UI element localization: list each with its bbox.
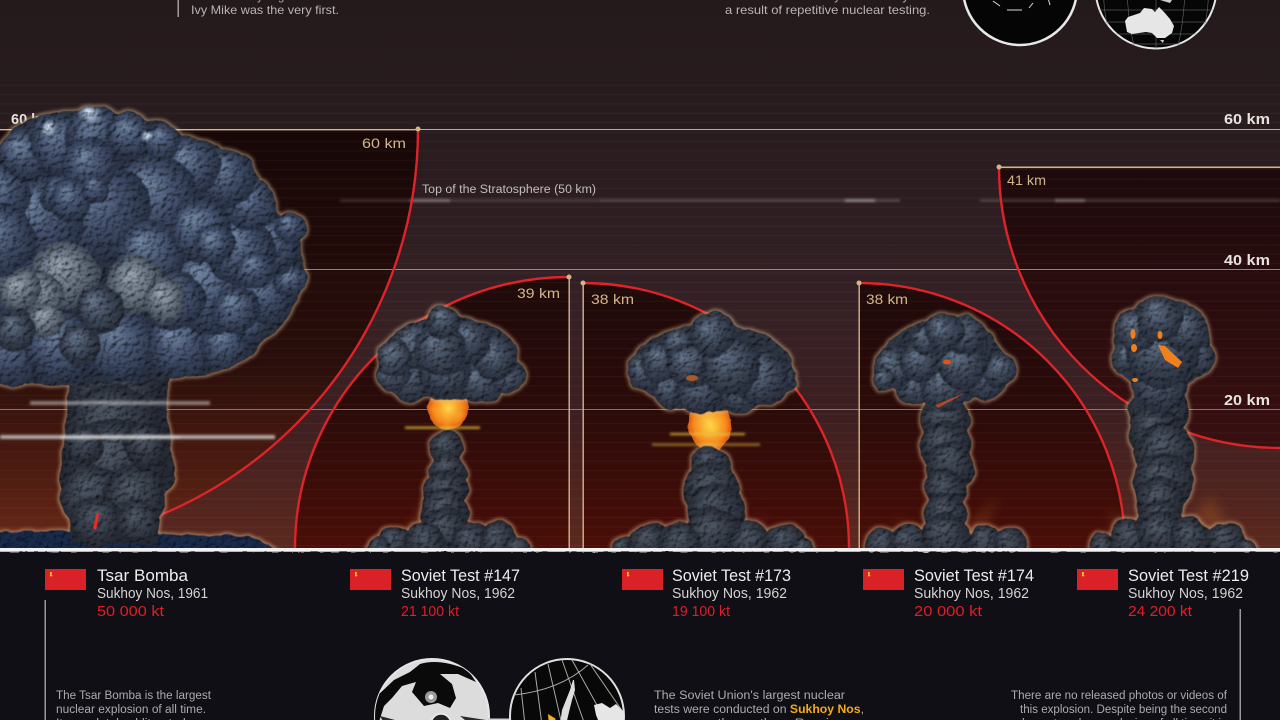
Test 174 ember [935,360,965,408]
ground glow rays [405,490,1230,545]
icon: globe australia [1096,0,1217,50]
axis labels: 60 km [11,112,52,128]
height marker lines and dots [0,126,1280,548]
text block: Tsar Bomba: The Tsar Bomba is the largest [56,690,212,702]
locator maps [370,659,625,720]
flag and labels: Test 173 [622,566,791,620]
icon: Sukhoy Nos locator globe [510,659,625,720]
flag and labels: Test 219: 24 200 kt [1128,604,1192,620]
Tsar Bomba stem silhouette [58,370,176,545]
text block: Sukhoy Nos: tests were conducted on Sukhoy Nos , [654,704,864,716]
flag and labels: Test 147 [350,566,520,620]
height zone: Test 173 38 km [583,283,849,548]
height zone: Test 147 39 km [295,277,569,548]
top note: Ivy Mike: Ivy Mike was the very first. [191,3,339,17]
text block: Test 219 [1011,609,1241,720]
mushroom cloud: Test 219 [1089,295,1257,562]
stratosphere band [340,199,1280,202]
flag and labels: Test 174 [863,566,1034,620]
axis labels: 20 km [1224,393,1270,409]
text block: Tsar Bomba [44,600,212,720]
flag and labels: Test 174: Sukhoy Nos, 1962 [914,586,1029,602]
flag and labels: Tsar Bomba: Sukhoy Nos, 1961 [97,586,208,602]
flag and labels: Test 147: Soviet Test #147 [401,566,520,585]
mushroom cloud: Test 173 [610,312,814,565]
Test 147 flash band [405,426,480,429]
flag and labels: Test 219: Soviet Test #219 [1128,566,1249,585]
top note: repetitive testing: a result of repetitive nuclear testing. [725,3,930,17]
mushroom cloud: Test 174 [865,312,1027,562]
height labels: 38 km [591,291,634,307]
height labels: 41 km [1007,172,1046,188]
stratosphere label: Top of the Stratosphere (50 km) [422,184,596,196]
Tsar Bomba light puffs [41,104,154,142]
Test 173 fireball [688,399,732,451]
flag and labels: Tsar Bomba [45,566,208,620]
altitude grid lines [0,129,1280,410]
Tsar Bomba ground base [0,531,278,552]
flag and labels: Test 147: 21 100 kt [401,604,459,620]
height labels: 60 km [362,135,406,151]
axis labels [11,112,1270,409]
Tsar Bomba cap silhouette [0,110,304,388]
flag and labels: Test 174: Soviet Test #174 [914,566,1034,585]
icon: arctic globe [370,659,489,720]
flag and labels: Test 147: Sukhoy Nos, 1962 [401,586,515,602]
height labels: 38 km [866,291,908,307]
flag and labels: Tsar Bomba: Tsar Bomba [97,566,189,585]
height arcs [0,129,1280,548]
flag and labels: Test 173: Sukhoy Nos, 1962 [672,586,787,602]
mushroom cloud: Test 147 [365,305,530,562]
Test 173 flash bands [652,433,760,446]
flag and labels: Tsar Bomba: 50 000 kt [97,604,164,620]
mushroom cloud: Tsar Bomba [0,104,306,552]
height zone: Test 174 38 km [859,283,1125,548]
text block: Sukhoy Nos: The Soviet Union's largest nuclear [654,690,845,702]
height zone: Tsar Bomba 60 km [0,129,418,547]
Test 147 fireball [428,386,468,430]
Tsar Bomba condensation bands [0,401,275,439]
lower panel [0,550,1280,720]
Tsar Bomba mushroom cap [0,105,306,386]
flag and labels: Test 173: Soviet Test #173 [672,566,791,585]
text block: Sukhoy Nos [654,690,864,720]
flag and labels: Test 219 [1077,566,1249,620]
ground line [0,548,1280,552]
axis labels: 40 km [1224,253,1270,269]
Tsar Bomba stem [60,349,167,548]
Tsar Bomba foreground puffs [0,241,187,338]
flag and labels: Test 174: 20 000 kt [914,604,982,620]
Test 219 embers [1130,329,1182,382]
flag and labels: Test 219: Sukhoy Nos, 1962 [1128,586,1243,602]
height labels: 39 km [517,285,560,301]
icon: globe pacific [963,0,1077,45]
text block: Tsar Bomba: nuclear explosion of all time. [56,704,206,716]
flag and labels: Test 173: 19 100 kt [672,604,730,620]
icon: yellow location marker [548,714,556,720]
Test 173 ember [686,375,698,381]
sky background [0,0,1280,550]
height zone: Test 219 41 km [999,167,1280,448]
axis labels: 60 km [1224,112,1270,128]
height labels [362,135,1046,307]
connector [488,718,512,720]
text block: Test 219: this explosion. Despite being the second [1020,704,1227,716]
text block: Test 219: There are no released photos or videos of [1011,690,1228,702]
Tsar Bomba red hot spot [93,512,99,530]
